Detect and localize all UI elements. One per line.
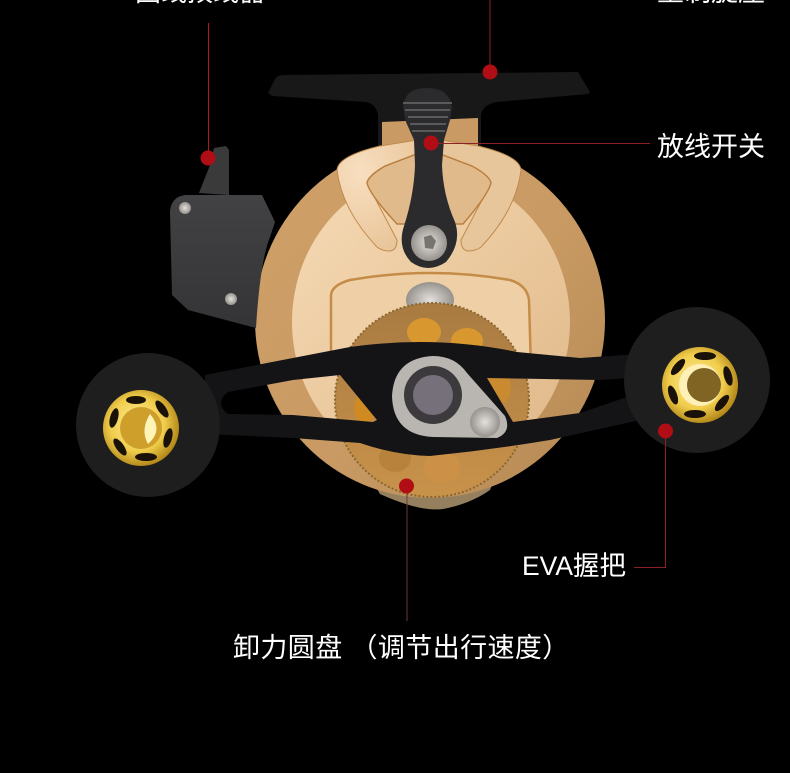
- lever screw: [411, 225, 447, 261]
- reel foot: [268, 72, 590, 150]
- handle centre plate: [392, 356, 507, 438]
- right wing lobe: [429, 138, 521, 251]
- reel illustration: [76, 72, 770, 509]
- label: drag disc: 卸力圆盘 （调节出行速度）: [233, 633, 570, 663]
- inner plate: [292, 172, 570, 472]
- small screw: [470, 407, 500, 437]
- reel body: [255, 142, 605, 498]
- callout: clicker line and dot: [200, 23, 216, 166]
- release lever: [402, 88, 457, 268]
- label: EVA grip: EVA握把: [522, 551, 626, 581]
- left wing lobe: [337, 138, 429, 251]
- callout: drag disc line and dot: [399, 478, 414, 621]
- raised rectangular panel: [331, 273, 531, 370]
- label: line release switch: 放线开关: [657, 132, 765, 162]
- wheel screw: [406, 282, 454, 318]
- mount tab: [382, 118, 478, 160]
- callout: release switch line and dot: [424, 136, 650, 150]
- gold wheel with holes: [335, 303, 529, 497]
- right EVA knob: [624, 307, 770, 453]
- wing inner panel: [367, 155, 491, 224]
- callout: EVA grip line and dot: [634, 424, 673, 568]
- left EVA knob: [76, 353, 220, 497]
- callout: foot line and dot: [482, 0, 498, 80]
- handle arm: [205, 342, 640, 456]
- hex nut: [404, 366, 462, 424]
- bottom drag disc rim: [370, 455, 494, 509]
- side clicker box: [170, 146, 275, 328]
